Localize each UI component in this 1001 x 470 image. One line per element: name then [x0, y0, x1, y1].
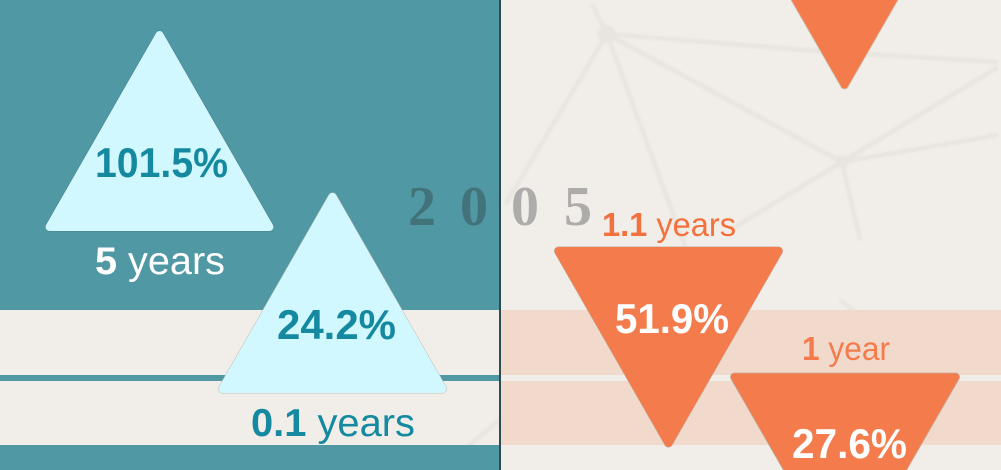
label: 5 years: 5 years — [95, 240, 225, 283]
triangle: 101.5% over 5 years — [50, 35, 270, 227]
label: 0.1 years: 0.1 years — [251, 402, 415, 445]
background network pattern — [445, 4, 998, 465]
value: 24.2%: 24.2% — [277, 301, 396, 348]
value: 51.9%: 51.9% — [615, 295, 729, 342]
triangle: 24.2% over 0.1 years — [222, 197, 442, 389]
value: 101.5%: 101.5% — [95, 139, 228, 186]
triangle: 51.9% — [558, 251, 778, 443]
triangle: 27.6% cropped at bottom — [731, 373, 959, 470]
panel: right peach bands — [500, 310, 1001, 445]
panel: left teal background — [0, 0, 500, 470]
center divider — [499, 0, 501, 470]
triangle: orange top cropped — [791, 0, 898, 89]
year label: 2005: 2005 — [408, 176, 592, 238]
value: 27.6%: 27.6% — [792, 420, 907, 467]
label: 1 year: 1 year — [802, 330, 890, 367]
label: 1.1 years: 1.1 years — [602, 206, 736, 243]
